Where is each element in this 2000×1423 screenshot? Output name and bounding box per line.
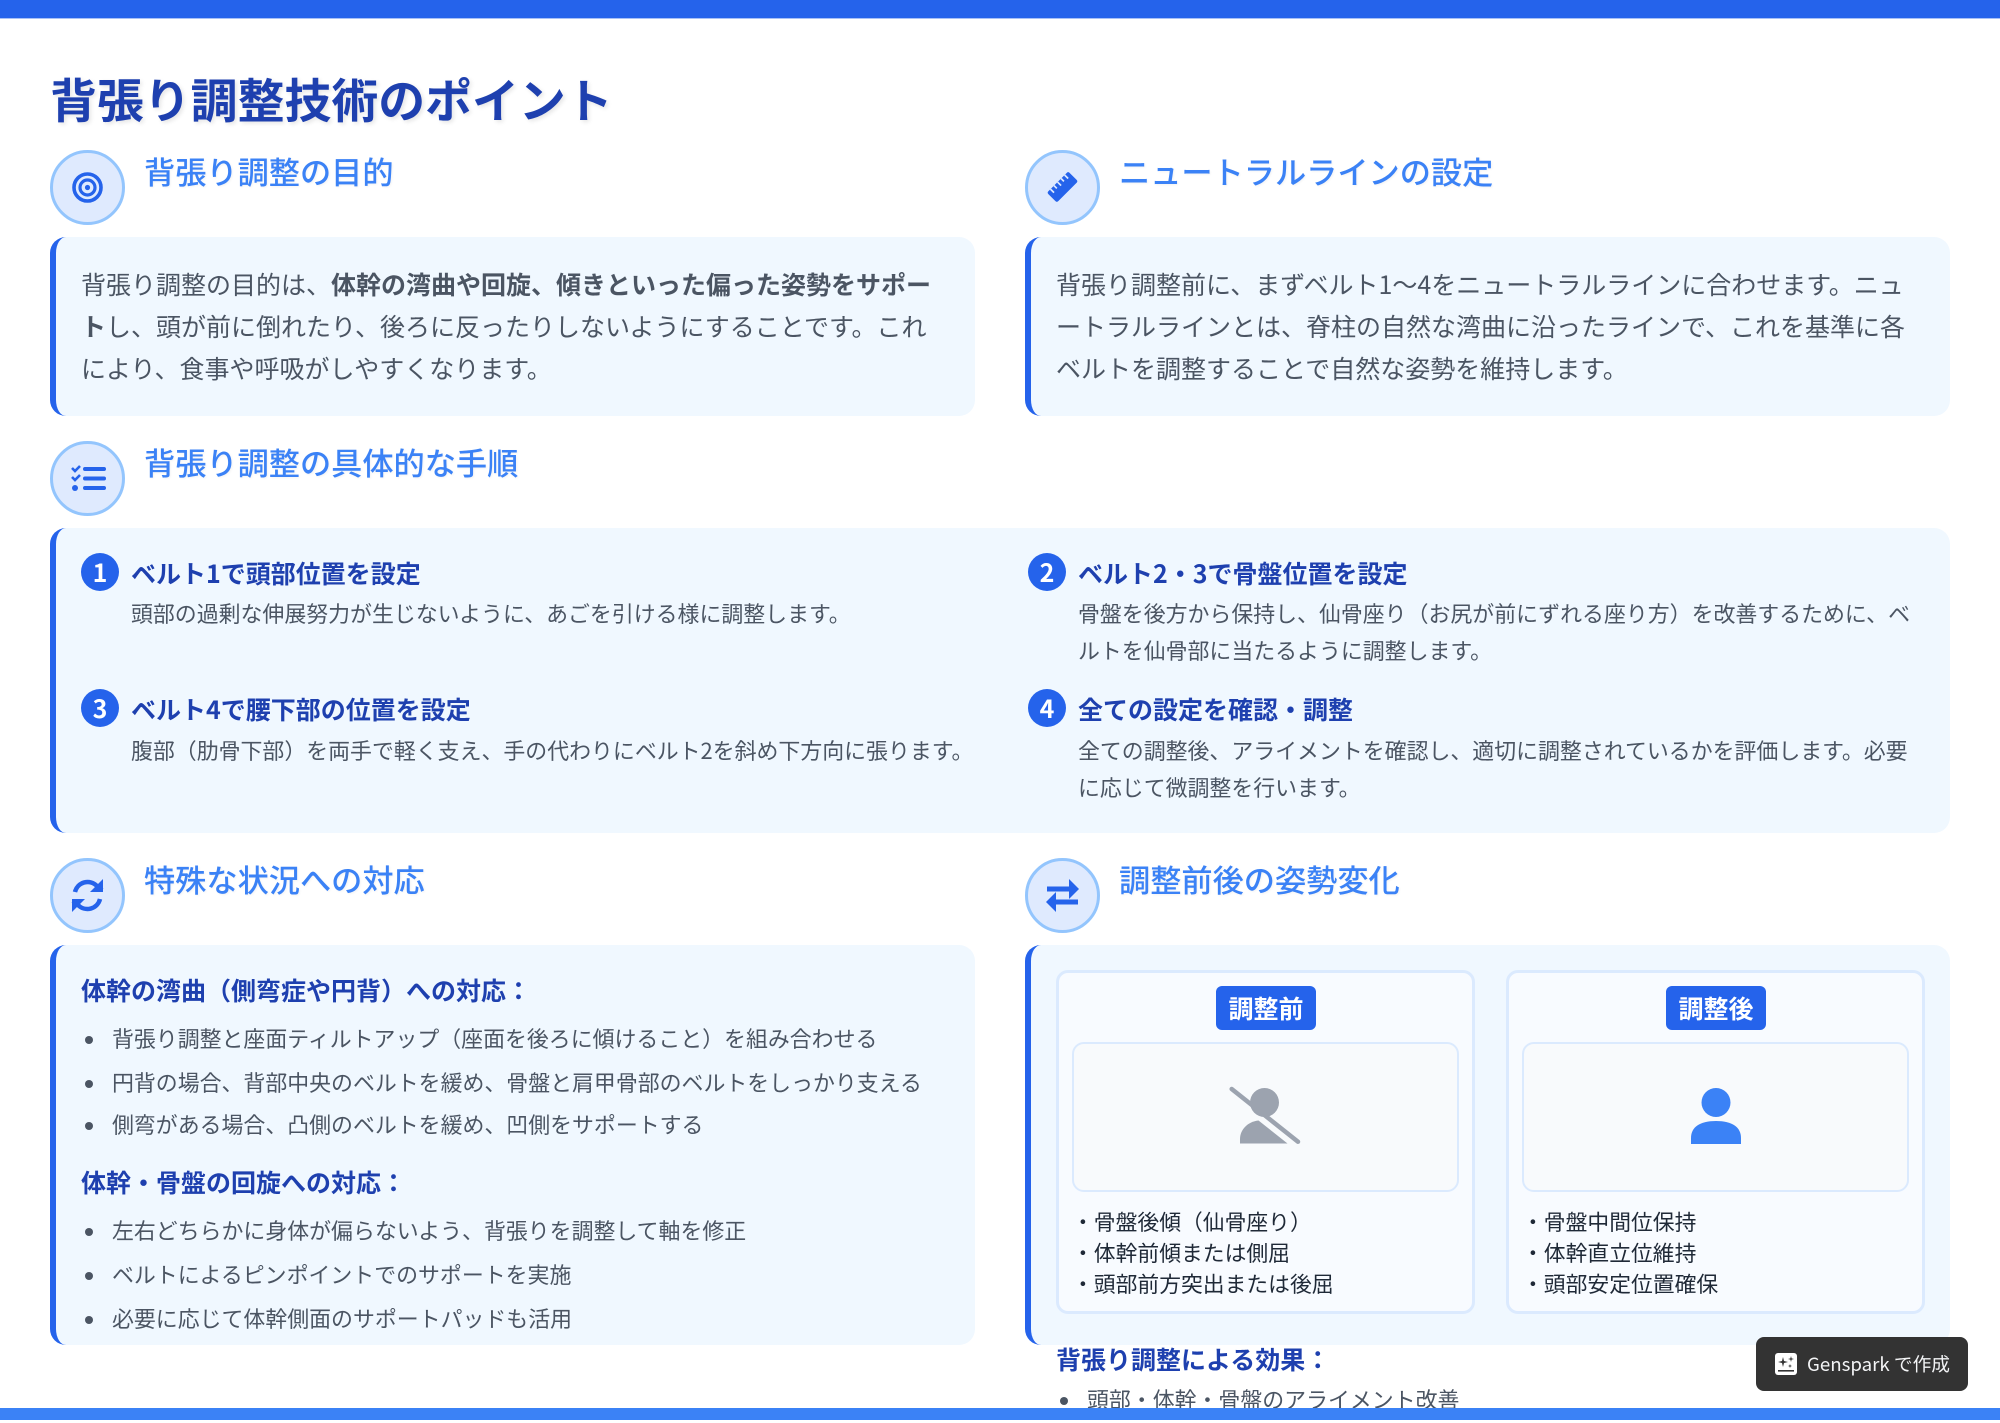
- badge: after: 調整後: [1678, 990, 1754, 1026]
- text: neutral line body: ートラルラインとは、脊柱の自然な湾曲に沿ったラインで、これを基準に各: [1056, 308, 1905, 344]
- icon: exchange arrows: [1025, 858, 1100, 933]
- list: rotation items: ベルトによるピンポイントでのサポートを実施: [112, 1259, 571, 1290]
- text: neutral line body: ベルトを調整することで自然な姿勢を維持します。: [1056, 350, 1628, 386]
- list: curvature items: 円背の場合、背部中央のベルトを緩め、骨盤と肩甲骨部のベルトをしっかり支える: [112, 1067, 922, 1098]
- step 4 description: 全ての調整後、アライメントを確認し、適切に調整されているかを評価します。必要: [1078, 735, 1908, 766]
- number 2: [1028, 553, 1066, 591]
- list: after: ・骨盤中間位保持: [1522, 1206, 1696, 1237]
- icon: ruler: [1025, 150, 1100, 225]
- title: 背張り調整技術のポイント: [50, 64, 613, 132]
- panel: purpose: [50, 237, 975, 416]
- icon: user slash: [1230, 1086, 1300, 1144]
- number 4: [1028, 689, 1066, 727]
- section: purpose: [50, 148, 975, 416]
- step 2: [1028, 553, 1910, 666]
- list: rotation items: 左右どちらかに身体が偏らないよう、背張りを調整して軸を修正: [112, 1215, 746, 1246]
- list: rotation items: [85, 1215, 746, 1334]
- list: before: [1072, 1206, 1334, 1299]
- step 2 description: ルトを仙骨部に当たるように調整します。: [1078, 635, 1492, 666]
- heading: neutral line: ニュートラルラインの設定: [1119, 148, 1493, 192]
- text: purpose body: [81, 266, 931, 386]
- icon: target: [50, 150, 125, 225]
- step 4 description: に応じて微調整を行います。: [1078, 772, 1361, 803]
- panel: neutral line: [1025, 237, 1950, 416]
- step 2 description: 骨盤を後方から保持し、仙骨座り（お尻が前にずれる座り方）を改善するために、ベ: [1078, 598, 1910, 629]
- number 3: [81, 689, 119, 727]
- step 1 description: 頭部の過剰な伸展努力が生じないように、あごを引ける様に調整します。: [131, 598, 851, 629]
- image box: before: [1072, 1042, 1459, 1192]
- list: before: ・頭部前方突出または後屈: [1072, 1268, 1334, 1299]
- step 4 title: 全ての設定を確認・調整: [1078, 691, 1353, 727]
- section: special situations: [50, 856, 975, 1345]
- section: before and after: [1025, 856, 1950, 1415]
- number 1: 1: [93, 554, 107, 590]
- step 2 description: [1078, 598, 1910, 666]
- text: purpose body: により、食事や呼吸がしやすくなります。: [81, 350, 552, 386]
- list: after: ・頭部安定位置確保: [1522, 1268, 1718, 1299]
- icon: sync: [50, 858, 125, 933]
- step 4: [1028, 689, 1908, 803]
- list: curvature items: [85, 1023, 922, 1140]
- step 3: [81, 689, 973, 766]
- section: neutral line: [1025, 148, 1950, 416]
- number 3: 3: [93, 690, 107, 726]
- list: effects: 頭部・体幹・骨盤のアライメント改善: [1087, 1384, 1459, 1415]
- heading: procedure: 背張り調整の具体的な手順: [144, 438, 518, 484]
- subheading: rotation: 体幹・骨盤の回旋への対応：: [81, 1164, 406, 1200]
- badge: before: 調整前: [1228, 990, 1304, 1026]
- badge: before: [1216, 986, 1316, 1030]
- number 2: 2: [1040, 554, 1054, 590]
- badge: after: [1666, 986, 1766, 1030]
- card: after: [1506, 970, 1925, 1314]
- badge text: Genspark で作成: [1807, 1350, 1950, 1377]
- heading: special situations: 特殊な状況への対応: [144, 856, 425, 900]
- list: after: [1522, 1206, 1718, 1299]
- step 4 description: [1078, 735, 1908, 803]
- card: before: [1056, 970, 1475, 1314]
- panel: procedure steps: [50, 528, 1950, 833]
- text: neutral line body: 背張り調整前に、まずベルト1～4をニュートラルラインに合わせます。ニュ: [1056, 266, 1904, 302]
- step 3 description: 腹部（肋骨下部）を両手で軽く支え、手の代わりにベルト2を斜め下方向に張ります。: [131, 735, 973, 766]
- list: after: ・体幹直立位維持: [1522, 1237, 1696, 1268]
- section: procedure: [50, 438, 1950, 833]
- text: purpose body: 背張り調整の目的は、体幹の湾曲や回旋、傾きといった偏った姿勢をサポー: [81, 266, 931, 302]
- icon: user: [1691, 1088, 1741, 1144]
- text: purpose body: トし、頭が前に倒れたり、後ろに反ったりしないようにすることです。これ: [81, 308, 927, 344]
- subheading: effects: 背張り調整による効果：: [1056, 1341, 1330, 1377]
- badge: Genspark: [1756, 1337, 1968, 1391]
- list: before: ・骨盤後傾（仙骨座り）: [1072, 1206, 1312, 1237]
- bottom bar: [0, 1408, 2000, 1420]
- number 4: 4: [1040, 690, 1054, 726]
- step 1 title: ベルト1で頭部位置を設定: [131, 555, 421, 591]
- image box: after: [1522, 1042, 1909, 1192]
- list: curvature items: 背張り調整と座面ティルトアップ（座面を後ろに傾けること）を組み合わせる: [112, 1023, 877, 1054]
- list: curvature items: 側弯がある場合、凸側のベルトを緩め、凹側をサポートする: [112, 1109, 703, 1140]
- icon: checklist: [50, 441, 125, 516]
- list: before: ・体幹前傾または側屈: [1072, 1237, 1290, 1268]
- step 2 title: ベルト2・3で骨盤位置を設定: [1078, 555, 1408, 591]
- panel: before and after: [1025, 945, 1950, 1345]
- heading: before and after: 調整前後の姿勢変化: [1119, 856, 1400, 900]
- subheading: curvature: 体幹の湾曲（側弯症や円背）への対応：: [81, 972, 531, 1008]
- step 1: [81, 553, 851, 629]
- step 3 title: ベルト4で腰下部の位置を設定: [131, 691, 471, 727]
- number 1: [81, 553, 119, 591]
- heading: purpose: 背張り調整の目的: [144, 148, 394, 192]
- list: rotation items: 必要に応じて体幹側面のサポートパッドも活用: [112, 1303, 572, 1334]
- text: neutral line body: [1056, 266, 1905, 386]
- icon: Genspark logo: [1775, 1353, 1797, 1375]
- panel: special situations: [50, 945, 975, 1345]
- top bar: [0, 0, 2000, 18]
